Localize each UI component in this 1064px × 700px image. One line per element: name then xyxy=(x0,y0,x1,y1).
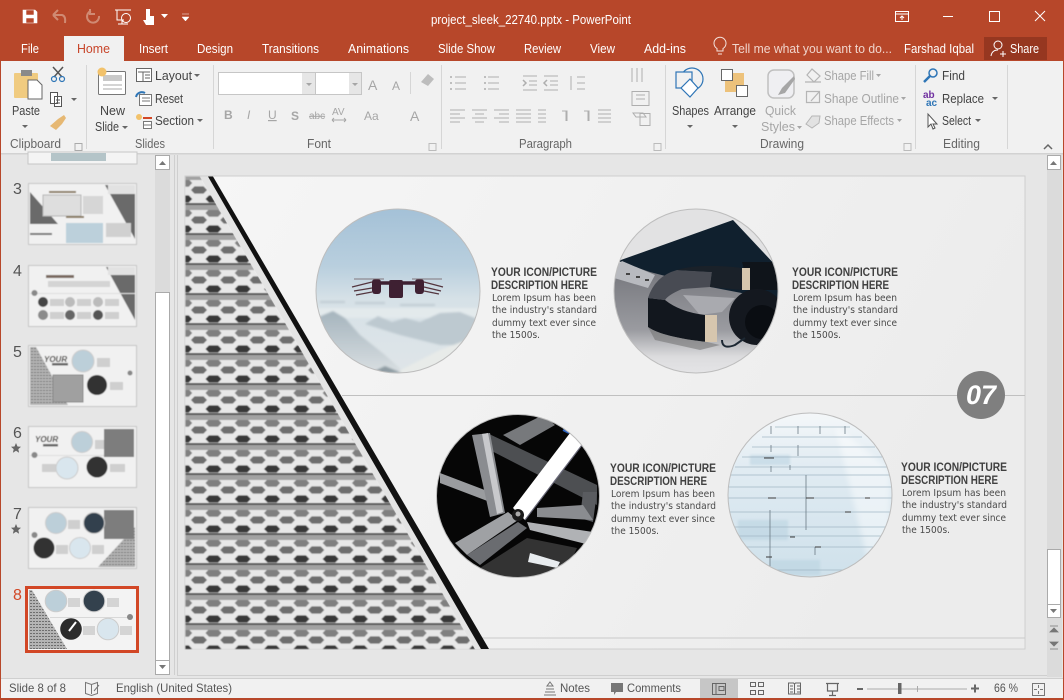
thumbnail 3 xyxy=(28,184,136,244)
tab: Design: Design xyxy=(197,41,233,56)
slide number badge: 07 xyxy=(966,380,998,410)
label: Paragraph: Paragraph xyxy=(519,137,572,151)
icon: lightbulb xyxy=(714,37,726,54)
text: description 4: YOUR ICON/PICTURE xyxy=(901,462,1007,474)
label: Select: Select xyxy=(942,113,971,128)
slide number 3: 3 xyxy=(13,181,22,198)
tab: Insert: Insert xyxy=(139,41,168,56)
share button: Share xyxy=(1010,41,1039,56)
star marker xyxy=(11,443,21,453)
text: description 4: Lorem Ipsum has been xyxy=(902,488,1006,499)
icon: touch mode xyxy=(143,9,154,25)
editor scrollbar xyxy=(1047,155,1062,677)
format buttons: A xyxy=(410,108,420,124)
icon: shape outline xyxy=(806,92,820,102)
direction icons xyxy=(562,111,589,121)
slide number 4: 4 xyxy=(13,263,22,280)
icon: find xyxy=(924,69,937,82)
text: description 2: the industry's standard xyxy=(793,305,898,316)
panel dividers xyxy=(174,155,1047,676)
icon: save xyxy=(23,10,37,23)
icon: spell check xyxy=(86,682,99,696)
picture: steel beams xyxy=(436,414,600,578)
customize toolbar xyxy=(182,14,189,21)
tab: View: View xyxy=(590,41,616,56)
text: description 3: dummy text ever since xyxy=(611,514,715,525)
text: description 1: DESCRIPTION HERE xyxy=(491,280,588,292)
black diagonal band xyxy=(208,176,489,649)
document title: project_sleek_22740.pptx - PowerPoint xyxy=(431,12,631,27)
label: Find: Find xyxy=(942,68,965,83)
ribbon xyxy=(1,61,1063,154)
text: description 1: dummy text ever since xyxy=(492,318,596,329)
text: description 4 xyxy=(901,462,1007,536)
view: slide show xyxy=(826,684,839,696)
text: description 1 xyxy=(491,267,597,341)
format buttons xyxy=(224,107,420,124)
slide number 8: 8 xyxy=(13,587,22,604)
icon: undo xyxy=(53,10,65,23)
text: description 2: Lorem Ipsum has been xyxy=(793,293,897,304)
format buttons: abc xyxy=(309,111,325,122)
grow and shrink font: A xyxy=(368,77,378,93)
picture outline xyxy=(728,413,892,577)
picture outline xyxy=(316,209,480,373)
status bar xyxy=(1,678,1063,698)
group: Slides: Slide xyxy=(95,119,119,134)
picture: drone over mountains xyxy=(316,209,480,373)
text: description 3: Lorem Ipsum has been xyxy=(611,489,715,500)
slide counter: Slide 8 of 8 xyxy=(9,681,66,695)
label: Shape Effects: Shape Effects xyxy=(824,113,894,128)
text: description 3: the 1500s. xyxy=(611,526,659,537)
icon: clear formatting xyxy=(421,74,434,86)
slide background xyxy=(185,176,1025,649)
thumbnail 4 xyxy=(28,266,136,326)
format buttons: S xyxy=(291,109,299,123)
slide number 7: 7 xyxy=(13,506,22,523)
group: Paragraph xyxy=(450,68,661,151)
format buttons: B xyxy=(224,108,233,122)
group: Drawing: Styles xyxy=(761,119,795,134)
user name: Farshad Iqbal xyxy=(904,41,974,56)
label: Shapes: Shapes xyxy=(672,103,709,118)
label: New Slide: New xyxy=(100,103,126,118)
format buttons: U xyxy=(268,108,277,122)
text: description 1: the industry's standard xyxy=(492,305,597,316)
label: Font: Font xyxy=(307,137,332,151)
text: description 1: the 1500s. xyxy=(492,330,540,341)
slide canvas xyxy=(185,176,1025,649)
label: Replace: Replace xyxy=(942,91,984,106)
partial thumbnail 2 xyxy=(28,152,137,164)
thumbnail 5 xyxy=(28,346,136,406)
label: Slides: Slides xyxy=(135,137,165,151)
label: Layout: Layout xyxy=(155,68,192,83)
bullet dots xyxy=(450,77,547,89)
thumbnail scrollbar xyxy=(155,155,170,675)
text: description 2: dummy text ever since xyxy=(793,318,897,329)
text: description 3: the industry's standard xyxy=(611,501,716,512)
icon: quick styles xyxy=(768,70,795,98)
tab: Slide Show: Slide Show xyxy=(438,41,496,56)
label: Shape Fill: Shape Fill xyxy=(824,68,874,83)
ribbon tabs xyxy=(21,36,1047,62)
previous slide xyxy=(1050,626,1058,632)
horizontal rule middle xyxy=(342,395,1025,396)
picture outline xyxy=(614,209,778,373)
zoom slider xyxy=(857,683,979,694)
window: close xyxy=(1035,11,1045,21)
tab: Review: Review xyxy=(524,41,562,56)
tab: Home: Home xyxy=(77,41,110,56)
slide number badge xyxy=(957,371,1005,419)
icon: play circle xyxy=(122,14,130,22)
tab: Animations: Animations xyxy=(348,41,409,56)
slide number 5: 5 xyxy=(13,344,22,361)
text: description 2: DESCRIPTION HERE xyxy=(792,280,889,292)
icon: replace: ac xyxy=(926,98,938,109)
icon: paste xyxy=(14,70,42,99)
label: Comments: Comments xyxy=(627,681,681,695)
window: ribbon display xyxy=(896,12,908,22)
group: Editing xyxy=(923,68,998,151)
label: Section: Section xyxy=(155,113,194,128)
icon: notes xyxy=(544,682,556,695)
text: description 2: the 1500s. xyxy=(793,330,841,341)
font name box xyxy=(218,72,362,94)
icon: reset xyxy=(140,94,152,106)
group: Font xyxy=(218,72,436,151)
tab: Add-ins: Add-ins xyxy=(644,41,686,56)
picture outline xyxy=(436,414,600,578)
list and indent icons xyxy=(455,76,585,90)
horizontal rule bottom xyxy=(482,638,1025,639)
tab: File: File xyxy=(21,41,39,56)
text: description 4: the 1500s. xyxy=(902,525,950,536)
label: Shape Outline: Shape Outline xyxy=(824,91,899,106)
thumbnail 8 selected xyxy=(26,588,138,652)
window: minimize xyxy=(943,16,953,17)
group: Clipboard xyxy=(10,67,82,151)
text: description 1: YOUR ICON/PICTURE xyxy=(491,267,597,279)
label: Paste: Paste xyxy=(12,103,40,118)
icon: select xyxy=(928,114,937,129)
label: Editing: Editing xyxy=(943,137,980,151)
icon: drone xyxy=(352,279,443,298)
text tools xyxy=(632,68,650,126)
icon: format painter xyxy=(50,115,66,130)
format buttons: I xyxy=(247,108,251,122)
silver diagonal band xyxy=(200,176,481,649)
icon: layout xyxy=(136,68,152,82)
text: description 2 xyxy=(792,267,898,341)
icon: cut xyxy=(52,67,64,82)
slide number 6: 6 xyxy=(13,425,22,442)
text: description 4: dummy text ever since xyxy=(902,513,1006,524)
group: Font: A xyxy=(392,79,400,93)
icon: shape effects xyxy=(806,116,820,128)
icon: presentation from start xyxy=(115,10,131,24)
label: Clipboard: Clipboard xyxy=(10,137,61,151)
alignment icons xyxy=(450,110,611,122)
label: Reset: Reset xyxy=(155,91,183,106)
icon: shapes xyxy=(676,68,703,97)
icon: new slide xyxy=(98,68,126,94)
thumbnail 7 xyxy=(28,508,136,568)
tab: Transitions: Transitions xyxy=(262,41,319,56)
title bar xyxy=(0,0,1064,61)
picture: headphones on laptop xyxy=(614,209,785,373)
metal mesh triangle xyxy=(186,176,475,649)
icon: section xyxy=(136,114,152,128)
view: normal active xyxy=(700,679,738,698)
icon: replace xyxy=(923,90,938,109)
picture: glass building xyxy=(728,413,892,577)
text: description 3: DESCRIPTION HERE xyxy=(610,476,707,488)
share button xyxy=(984,37,1047,60)
language: English (United States) xyxy=(116,681,232,695)
thumbnail 6: YOUR xyxy=(35,435,58,444)
thumbnail 5: YOUR xyxy=(44,355,67,364)
icon: copy xyxy=(50,92,62,106)
next slide xyxy=(1050,642,1058,649)
tell me box: Tell me what you want to do... xyxy=(732,41,892,56)
format buttons: Aa xyxy=(364,109,379,123)
window frame bottom xyxy=(0,698,1064,700)
label: Drawing: Drawing xyxy=(760,137,804,151)
zoom level: 66 % xyxy=(994,681,1018,695)
thumbnail 6 xyxy=(28,426,136,488)
text: description 3: YOUR ICON/PICTURE xyxy=(610,463,716,475)
label: Notes: Notes xyxy=(560,681,590,695)
thumbnail panel xyxy=(11,152,1047,676)
text: description 4: the industry's standard xyxy=(902,500,1007,511)
label: Arrange: Arrange xyxy=(714,103,756,118)
view: slide sorter xyxy=(750,682,764,694)
dropdown arrow xyxy=(161,14,168,18)
text: description 1: Lorem Ipsum has been xyxy=(492,293,596,304)
format buttons: AV xyxy=(332,107,345,118)
collapse ribbon xyxy=(1044,145,1052,149)
text: description 3 xyxy=(610,463,716,537)
window: maximize xyxy=(990,12,1000,22)
icon: arrange xyxy=(722,70,748,96)
icon: shape fill xyxy=(805,69,821,82)
icon: redo xyxy=(87,9,99,23)
star marker xyxy=(11,524,21,534)
icon: fit to window xyxy=(1032,684,1044,696)
group: Drawing xyxy=(672,68,911,151)
group: Slides xyxy=(95,68,203,151)
active tab background xyxy=(64,36,124,62)
icon: replace: ab xyxy=(923,90,935,101)
icon: comments xyxy=(611,683,623,695)
label: Quick Styles: Quick xyxy=(765,103,796,118)
text: description 2: YOUR ICON/PICTURE xyxy=(792,267,898,279)
text: description 4: DESCRIPTION HERE xyxy=(901,475,998,487)
view: reading xyxy=(788,683,800,694)
